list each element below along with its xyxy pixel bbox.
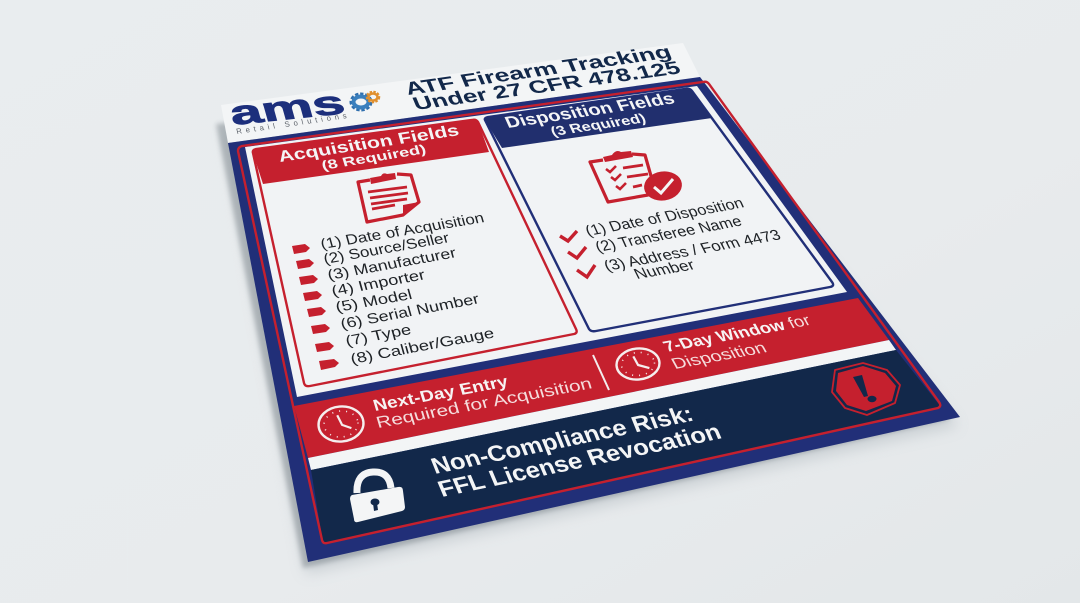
list items: (6) Serial Number <box>339 291 481 333</box>
poster sheet <box>221 43 960 562</box>
logo orange gear <box>368 92 378 102</box>
acquisition heading: (8 Required) <box>320 141 428 173</box>
card outline <box>253 120 577 386</box>
panel: acquisition fields <box>253 120 577 386</box>
panel: disposition fields <box>485 89 833 331</box>
list items: Number <box>631 257 698 283</box>
icon: padlock <box>350 472 405 522</box>
next-day text: Required for Acquisition <box>374 375 594 432</box>
logo blue gear <box>352 95 370 109</box>
red inner border <box>238 82 940 543</box>
logo wordmark: ams <box>225 84 349 133</box>
disposition list <box>560 196 784 283</box>
white strip <box>308 340 896 470</box>
list items: (8) Caliber/Gauge <box>349 326 496 368</box>
acquisition list <box>292 210 496 370</box>
disposition heading <box>502 90 678 139</box>
icon: clock <box>317 405 365 443</box>
icon: clock <box>615 347 661 381</box>
callout: next-day entry <box>317 373 594 443</box>
title <box>401 41 684 114</box>
risk text: Non-Compliance Risk: <box>427 401 697 479</box>
next-day text <box>371 373 594 432</box>
list items: (1) Date of Acquisition <box>319 210 486 253</box>
disposition header <box>485 89 712 148</box>
list items: (2) Source/Seller <box>322 230 451 268</box>
disposition heading: (3 Required) <box>548 111 648 139</box>
7-day text: Disposition <box>668 340 770 373</box>
title: ATF Firearm Tracking <box>401 41 675 99</box>
card outline <box>485 89 833 331</box>
list items: (2) Transferee Name <box>593 214 745 256</box>
title: Under 27 CFR 478.125 <box>409 57 684 114</box>
list items: (1) Date of Disposition <box>583 196 747 240</box>
list items: (4) Importer <box>330 267 427 300</box>
risk panel content <box>350 363 900 522</box>
divider <box>593 355 609 390</box>
dark risk panel <box>311 350 941 543</box>
list items: (3) Manufacturer <box>326 245 458 284</box>
7-day text <box>660 312 814 373</box>
header logo <box>225 84 378 136</box>
acquisition header <box>253 120 489 184</box>
list items: (7) Type <box>344 322 413 350</box>
risk text: FFL License Revocation <box>434 418 725 502</box>
check badge <box>642 169 684 203</box>
acquisition heading <box>276 122 461 173</box>
icon: warning octagon <box>832 363 900 415</box>
acquisition heading: Acquisition Fields <box>276 122 461 166</box>
callout: 7-day window <box>615 312 814 381</box>
list items <box>583 196 784 283</box>
list items <box>319 210 496 368</box>
icon: checklist clipboard <box>590 151 684 203</box>
content white panel <box>245 86 847 397</box>
icon: clipboard <box>358 173 419 222</box>
red status band <box>294 298 889 458</box>
list items: (3) Address / Form 4473 <box>601 227 784 275</box>
logo tagline: Retail Solutions <box>235 111 348 136</box>
next-day text: Next-Day Entry <box>371 373 510 415</box>
7-day text: 7-Day Window for <box>660 312 814 356</box>
bullet markers <box>292 244 339 370</box>
check marks <box>560 231 595 277</box>
disposition heading: Disposition Fields <box>502 90 678 132</box>
list items: (5) Model <box>334 287 414 316</box>
risk text <box>427 401 725 502</box>
